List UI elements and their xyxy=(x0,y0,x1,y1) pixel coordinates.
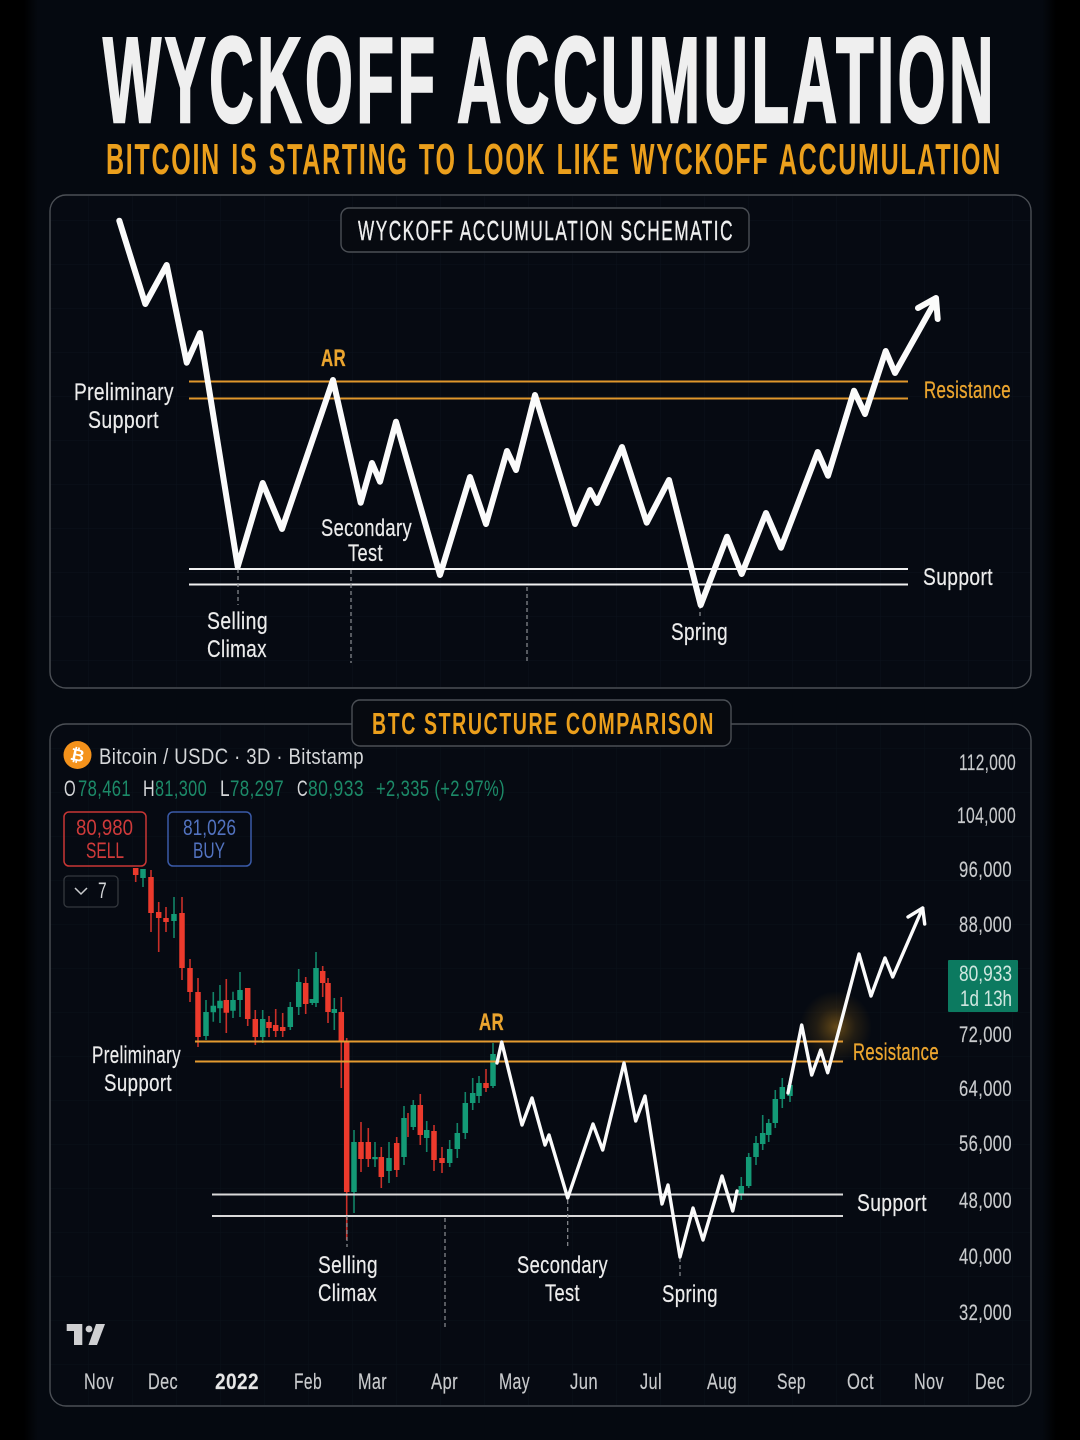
price axis: 96,000 xyxy=(959,857,1012,882)
price axis: 104,000 xyxy=(957,803,1016,828)
time axis: Apr xyxy=(431,1369,458,1394)
current price tag: 1d 13h xyxy=(960,986,1012,1011)
panel: BTC structure comparison xyxy=(50,700,1031,1406)
OHLC values: O xyxy=(64,776,76,801)
label: spring: Spring xyxy=(662,1281,718,1308)
price axis: 32,000 xyxy=(959,1300,1012,1325)
OHLC values: 78,297 xyxy=(230,776,284,801)
support band lines xyxy=(189,569,908,584)
label: preliminary support xyxy=(92,1042,181,1097)
resistance band lines xyxy=(195,1042,843,1062)
OHLC values: H xyxy=(143,776,155,801)
label: preliminary support: Preliminary xyxy=(92,1042,181,1069)
label: secondary test: Secondary xyxy=(517,1252,608,1279)
time axis: Nov xyxy=(84,1369,114,1394)
label: selling climax xyxy=(318,1252,378,1307)
label: secondary test xyxy=(321,515,412,567)
collapse indicators button: 7 xyxy=(98,878,107,903)
label: secondary test: Secondary xyxy=(321,515,412,542)
resistance band lines xyxy=(189,382,908,398)
time axis: Dec xyxy=(148,1369,178,1394)
label: selling climax: Selling xyxy=(318,1252,378,1279)
price axis: 56,000 xyxy=(959,1131,1012,1156)
label: AR: AR xyxy=(321,345,346,372)
icon: tradingview logo xyxy=(67,1324,105,1345)
label: preliminary support: Support xyxy=(88,407,159,434)
buy button: BUY xyxy=(193,838,225,863)
label: AR: AR xyxy=(479,1009,504,1036)
label: preliminary support: Preliminary xyxy=(74,379,174,406)
icon: bitcoin: ₿ xyxy=(68,745,86,767)
support band lines xyxy=(212,1194,843,1216)
label: support: Support xyxy=(857,1190,927,1217)
label: secondary test: Test xyxy=(545,1280,580,1307)
price axis: 72,000 xyxy=(959,1022,1012,1047)
label: support: Support xyxy=(923,564,993,591)
OHLC values: C xyxy=(297,776,308,801)
dashed event markers xyxy=(347,1200,680,1327)
label: preliminary support xyxy=(74,379,174,434)
OHLC values: +2,335 (+2.97%) xyxy=(376,776,505,801)
current price tag xyxy=(948,960,1018,1012)
time axis: Jun xyxy=(570,1369,598,1394)
schematic heading badge: WYCKOFF ACCUMULATION SCHEMATIC xyxy=(358,215,734,246)
label: selling climax: Climax xyxy=(207,636,267,663)
label: spring: Spring xyxy=(671,619,728,646)
comparison heading badge: BTC STRUCTURE COMPARISON xyxy=(372,706,715,741)
time axis: Sep xyxy=(777,1369,806,1394)
sell button: SELL xyxy=(86,838,124,863)
comparison heading badge xyxy=(352,700,731,746)
OHLC values: 78,461 xyxy=(78,776,131,801)
label: secondary test: Test xyxy=(348,540,383,567)
OHLC values: L xyxy=(220,776,230,801)
time axis: Aug xyxy=(707,1369,737,1394)
label: resistance: Resistance xyxy=(924,377,1011,404)
price axis: 48,000 xyxy=(959,1188,1012,1213)
price axis: 64,000 xyxy=(959,1076,1012,1101)
red candles xyxy=(136,868,486,1240)
label: selling climax: Selling xyxy=(207,608,268,635)
current price tag: 80,933 xyxy=(959,961,1012,986)
time axis: Oct xyxy=(847,1369,874,1394)
price axis: 112,000 xyxy=(959,750,1016,775)
time axis xyxy=(84,1369,1005,1394)
sell button xyxy=(64,812,146,866)
time axis: Mar xyxy=(358,1369,387,1394)
label: selling climax xyxy=(207,608,268,663)
time axis: Dec xyxy=(975,1369,1005,1394)
chart symbol header: Bitcoin / USDC · 3D · Bitstamp xyxy=(99,744,364,769)
time axis: May xyxy=(499,1369,530,1394)
label: secondary test xyxy=(517,1252,608,1307)
schematic heading badge xyxy=(341,208,749,252)
buy button: 81,026 xyxy=(183,815,236,840)
price axis xyxy=(957,750,1016,1325)
collapse indicators button xyxy=(64,876,118,907)
projected price path xyxy=(497,908,925,1257)
label: resistance: Resistance xyxy=(853,1039,939,1066)
label: selling climax: Climax xyxy=(318,1280,377,1307)
dashed event markers xyxy=(238,569,700,663)
time axis: Feb xyxy=(294,1369,322,1394)
label: preliminary support: Support xyxy=(104,1070,172,1097)
price axis: 88,000 xyxy=(959,912,1012,937)
OHLC values: 81,300 xyxy=(155,776,207,801)
OHLC values xyxy=(64,776,505,801)
time axis: 2022 xyxy=(215,1369,259,1394)
icon: bitcoin xyxy=(64,741,92,769)
candlestick chart xyxy=(136,868,790,1240)
green candles xyxy=(143,869,790,1213)
buy button xyxy=(168,812,251,866)
breakout glow xyxy=(800,991,872,1063)
OHLC values: 80,933 xyxy=(308,776,364,801)
time axis: Nov xyxy=(914,1369,944,1394)
sell button: 80,980 xyxy=(76,815,133,840)
price axis: 40,000 xyxy=(959,1244,1012,1269)
panel: wyckoff accumulation schematic xyxy=(50,195,1031,688)
time axis: Jul xyxy=(640,1369,662,1394)
schematic price path with arrow xyxy=(119,221,938,605)
